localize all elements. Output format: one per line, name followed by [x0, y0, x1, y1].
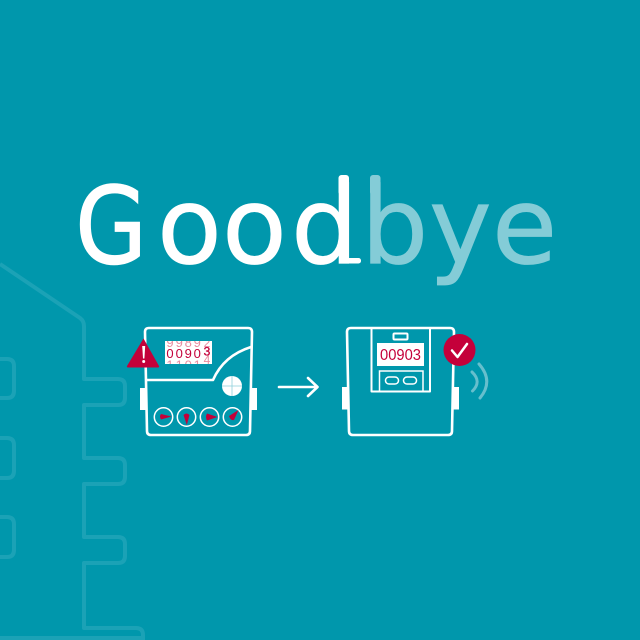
counter display: 9: [176, 335, 183, 350]
central module: [372, 328, 430, 392]
meter body: [145, 328, 252, 435]
arrow: [279, 378, 318, 396]
counter display: 0: [166, 346, 174, 361]
digital display: [377, 343, 424, 366]
counter display: 0: [176, 346, 183, 361]
counter display: 0: [185, 358, 192, 372]
counter display: [165, 341, 212, 364]
meter side tabs: [140, 388, 257, 410]
counter display: 3: [204, 344, 211, 358]
counter display: 4: [204, 353, 211, 367]
title: Goodbye: G: [75, 166, 147, 289]
digital display: 00903: [380, 347, 421, 364]
counter display: 1: [176, 358, 183, 372]
counter display: 8: [185, 335, 192, 350]
icon: warning triangle: [127, 338, 159, 368]
counter display: 9: [185, 346, 192, 361]
large crosshair dial: [222, 376, 242, 396]
counter display: 9: [194, 335, 201, 350]
old analogue meter: [127, 328, 257, 435]
lower panel with buttons: [380, 371, 423, 392]
background house outline: [0, 264, 143, 640]
counter display: 1: [166, 358, 174, 372]
meter side tabs: [342, 387, 459, 410]
meter body: [347, 328, 454, 435]
title: Goodbye: [75, 165, 557, 289]
new digital meter: [342, 328, 487, 435]
small dials: [154, 408, 242, 426]
title: Goodbye: bye: [361, 165, 557, 288]
icon: wireless waves: [472, 364, 487, 398]
title: Goodbye: ood: [157, 165, 358, 288]
counter display: 0: [194, 346, 201, 361]
icon: check badge: [444, 334, 476, 366]
counter display: 1: [194, 358, 201, 372]
counter display: 9: [166, 335, 174, 350]
counter display: 2: [204, 336, 211, 350]
dial pointers: [160, 410, 238, 425]
